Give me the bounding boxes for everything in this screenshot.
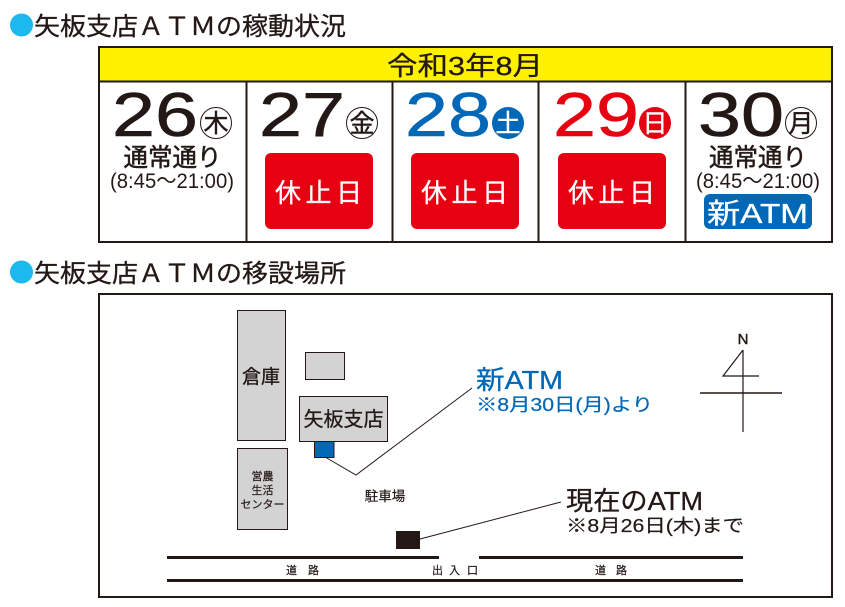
day: 26 Thursday: 26 [112,81,198,150]
day: 26 Thursday: 木 [203,110,229,138]
leader line: current ATM [420,502,561,539]
road: 口 [467,565,478,577]
road: 道 [286,563,297,577]
day: 30 Monday new ATM [696,81,820,229]
callout: new ATM: 新ATM [476,365,563,395]
building: farming life center [238,448,288,530]
day: 28 Saturday closed [405,81,524,229]
day: 30 Monday new ATM: (8:45～21:00) [696,170,820,193]
building: small shed [306,352,344,380]
callout: current ATM: 現在のATM [566,486,703,516]
building: Yaita branch [300,396,388,442]
building: Yaita branch: 矢板支店 [304,408,384,431]
heading: ATM status: 矢板支店ＡＴＭの稼動状況 [34,13,346,41]
month header [99,47,832,82]
icon: north compass [700,331,782,432]
building: warehouse [238,310,286,440]
callout: current ATM [566,486,744,536]
day: 30 Monday new ATM: 30 [698,81,784,150]
day: 27 Friday closed: 金 [349,110,375,138]
day: 26 Thursday: (8:45～21:00) [110,170,234,193]
building: farming life center: センター [240,498,284,511]
day: 29 Sunday closed: 29 [553,81,639,150]
road: 出 [432,564,443,577]
day: 29 Sunday closed: 休止日 [568,178,655,208]
callout: new ATM: ※8月30日(月)より [476,395,653,415]
building: farming life center: 生活 [252,483,274,497]
panel: calendar table [99,47,832,242]
road [167,556,743,582]
heading: ATM relocation: 矢板支店ＡＴＭの移設場所 [34,260,346,288]
day: 30 Monday new ATM: 通常通り [709,144,807,172]
day: 27 Friday closed: 27 [259,81,345,150]
road: 道 [595,563,606,577]
building: farming life center: 営農 [252,469,274,483]
day: 29 Sunday closed [553,81,671,229]
day: 28 Saturday closed: 28 [405,81,491,150]
marker: current ATM [396,531,420,549]
day: 26 Thursday [110,81,234,193]
day: 28 Saturday closed: 休止日 [421,178,508,208]
day: 27 Friday closed: 休止日 [275,178,362,208]
road: 路 [308,564,319,577]
panel: site map [99,294,832,597]
road: 路 [616,564,627,577]
marker: new ATM [314,442,334,458]
day: 30 Monday new ATM: 新ATM [707,198,808,229]
callout: current ATM: ※8月26日(木)まで [566,516,744,536]
leader line: new ATM [325,388,472,475]
day: 28 Saturday closed: 土 [495,110,521,138]
building: warehouse: 倉庫 [242,366,280,388]
month header: 令和3年8月 [387,51,543,81]
day: 30 Monday new ATM: 月 [788,110,814,138]
day: 29 Sunday closed: 日 [642,110,668,138]
road: 入 [449,565,460,577]
label: parking: 駐車場 [365,489,405,504]
icon: north compass: N [738,331,748,348]
callout: new ATM [476,365,653,415]
day: 26 Thursday: 通常通り [124,144,222,172]
day: 27 Friday closed [259,81,378,229]
